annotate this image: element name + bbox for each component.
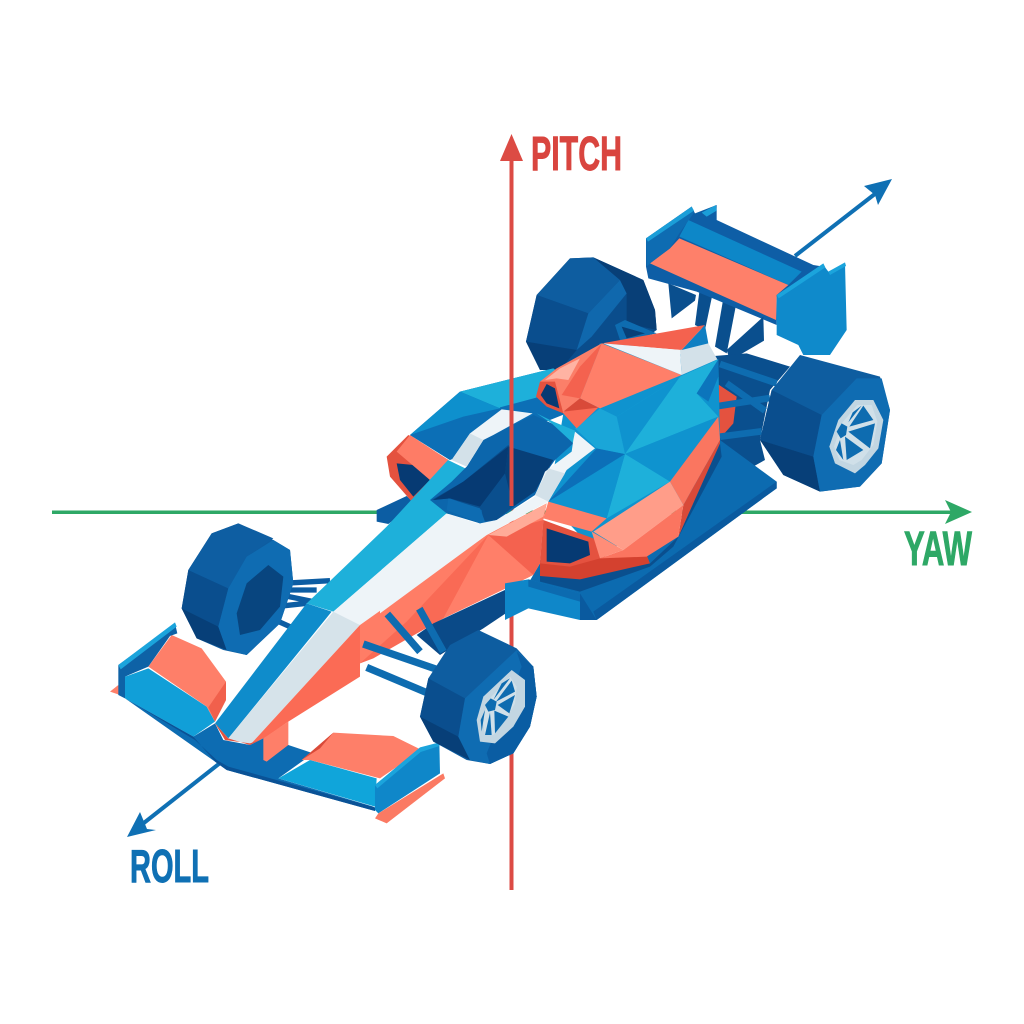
label: pitch: PITCH [531,128,622,181]
under-nose shadow [417,588,508,655]
front left tyre and suspension [182,523,330,655]
airbox [538,343,602,413]
engine cover facets [617,359,718,454]
rear wing [646,205,847,355]
airbox and engine cover [380,325,720,613]
front wing [110,622,445,823]
bargeboard [505,579,597,620]
front right suspension [363,609,443,693]
pitch axis upper segment [500,134,523,506]
left sidepod [387,368,580,503]
front right tyre [420,630,537,764]
nose cone [215,460,547,745]
pitch axis lower segment [510,500,514,890]
rear gearbox and suspension [705,317,790,468]
left suspension stub under sidepod [377,496,415,524]
chassis side [360,503,547,663]
rear wheel rim [829,400,883,473]
wing struts and fin [668,283,736,353]
label: yaw: YAW [904,523,972,576]
rear right tyre [760,355,890,492]
coral haunch [540,555,650,579]
yaw axis arrow [52,500,972,524]
base under body [548,343,720,557]
front wheel rim [477,670,525,743]
rear left tyre [526,257,657,370]
roll axis arrow [127,179,892,837]
inner cockpit surround [430,415,573,523]
label: roll: ROLL [130,840,209,892]
white stripes [452,409,533,467]
floor [528,440,777,620]
